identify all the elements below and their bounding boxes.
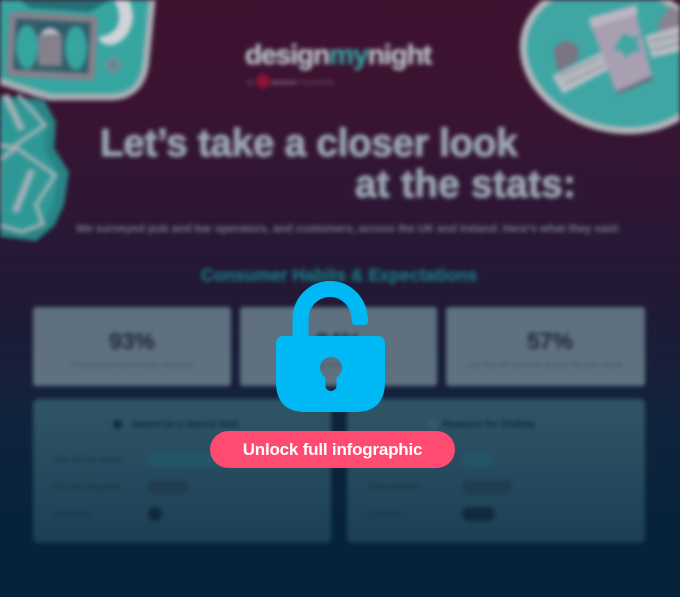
row 1: Over £40 per person xyxy=(54,455,123,464)
stat card 2: 84% xyxy=(315,328,362,354)
row 2 bar xyxy=(462,480,512,494)
row 3 bar xyxy=(148,507,162,521)
logo byline: by access hospitality xyxy=(247,79,335,86)
panel icon xyxy=(427,419,438,430)
stat card 3 xyxy=(446,307,645,386)
title: at the stats: xyxy=(355,163,576,206)
stat card 3: 57% xyxy=(527,328,573,354)
unlock button xyxy=(210,431,455,468)
sticker: top-right cup badge xyxy=(516,0,680,138)
sticker: top-left panel xyxy=(0,0,153,97)
row 3: Under £20 xyxy=(54,509,89,518)
logo xyxy=(242,39,435,90)
stat card 2: visit a pub or bar each month xyxy=(290,360,387,369)
padlock shackle end xyxy=(352,314,368,325)
row 1: Socialising xyxy=(368,455,404,464)
row 1 bar xyxy=(148,453,248,467)
section heading: Consumer Habits & Expectations xyxy=(201,265,477,285)
logo byline xyxy=(246,72,335,90)
sticker: top-left ticket badge xyxy=(0,0,158,244)
row 2: £20–£40 per person xyxy=(54,482,121,491)
panel icon xyxy=(113,420,122,429)
logo wordmark: designmynight xyxy=(245,39,431,70)
title: Let’s take a closer look xyxy=(100,122,517,165)
row 2 bar xyxy=(148,480,189,494)
stat card 3: say they will drink less alcohol this year overall xyxy=(468,360,623,369)
stat card 2 xyxy=(240,307,437,386)
stat card 1: of consumers drink in pubs and bars xyxy=(72,360,192,369)
intro text: We surveyed pub and bar operators, and customers, across the UK and Ireland. Here’s what they said: xyxy=(76,223,621,235)
row 3 bar xyxy=(462,507,495,521)
stat card 1 xyxy=(33,307,231,386)
icon: right ticket xyxy=(645,6,680,58)
icon: left ticket xyxy=(552,40,612,94)
panel heading: Spend on a typical visit xyxy=(132,419,238,430)
title xyxy=(99,122,576,206)
panel: reasons for visiting xyxy=(347,399,645,543)
row 2: Food and drink xyxy=(368,482,418,491)
icon: cup xyxy=(589,5,652,94)
sticker: left lower ribbon xyxy=(0,95,69,241)
row 1 bar xyxy=(462,453,492,467)
panel heading: Reasons for Visiting xyxy=(443,419,535,430)
stat card 1: 93% xyxy=(109,328,155,354)
padlock body xyxy=(276,336,385,412)
padlock shackle xyxy=(300,289,360,340)
panel: spend per visit xyxy=(33,399,331,543)
icon: open padlock xyxy=(276,281,385,412)
row 3: Live sport xyxy=(368,509,401,518)
unlock button: Unlock full infographic xyxy=(243,440,422,459)
